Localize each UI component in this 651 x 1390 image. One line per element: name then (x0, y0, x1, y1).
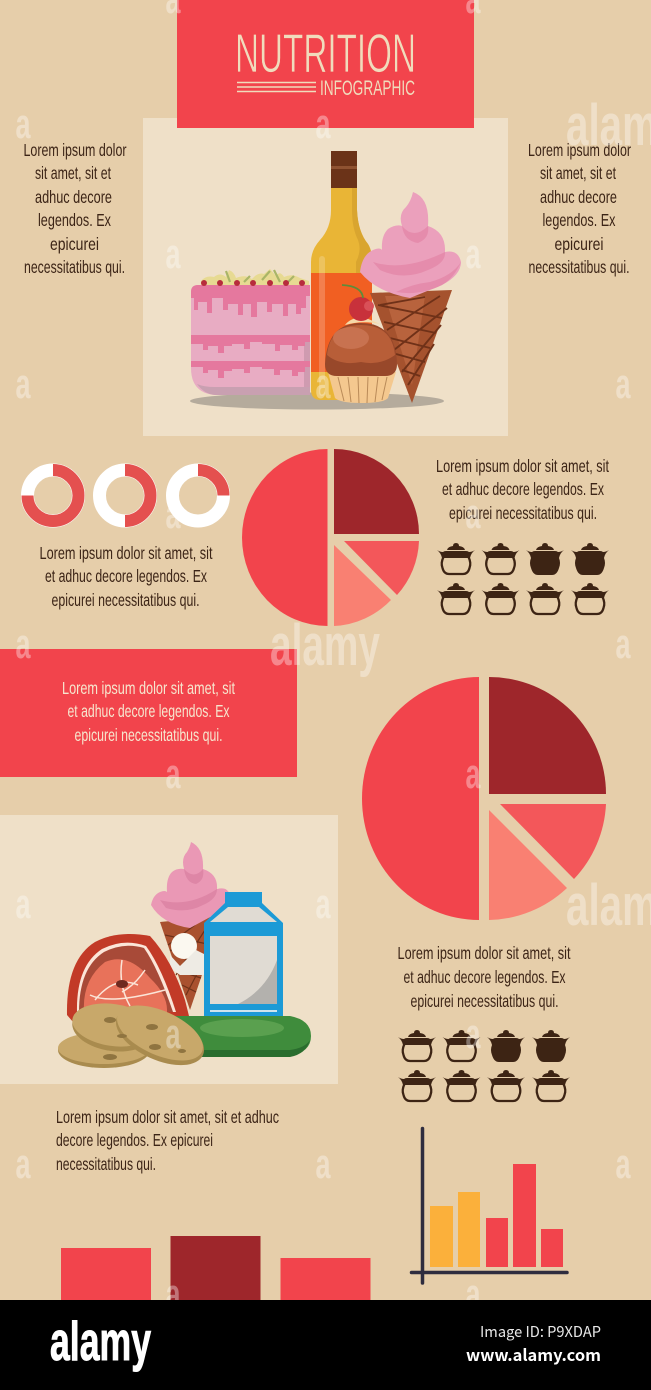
text block: lower right: et adhuc decore legendos. Ex (404, 967, 566, 987)
watermarks: a (16, 1140, 31, 1187)
donut charts (28, 470, 224, 521)
watermarks: a (466, 1270, 481, 1317)
text block: lower left: Lorem ipsum dolor sit amet, sit et adhuc (56, 1107, 279, 1127)
text block: top left: necessitatibus qui. (24, 257, 125, 277)
text block: callout (62, 678, 235, 745)
text block: top right: sit amet, sit et (540, 163, 616, 183)
icon: bottle (311, 151, 372, 400)
watermarks: a (466, 750, 481, 797)
subtitle: INFOGRAPHIC (320, 77, 415, 100)
text block: lower right: Lorem ipsum dolor sit amet, sit (398, 943, 571, 963)
text block: top right: adhuc decore (540, 187, 617, 207)
illustration: desserts and bottle (190, 151, 461, 410)
watermarks: a (316, 100, 331, 147)
icon: cake (191, 269, 310, 395)
watermarks: a (16, 620, 31, 667)
watermarks: a (616, 1140, 631, 1187)
icon: milk carton (204, 892, 283, 1016)
bottom bars (61, 1236, 370, 1300)
watermarks: a (316, 880, 331, 927)
text block: callout: et adhuc decore legendos. Ex (68, 701, 230, 721)
text block: callout: epicurei necessitatibus qui. (74, 725, 222, 745)
watermarks: a (16, 880, 31, 927)
text block: lower right (398, 943, 571, 1011)
watermarks: a (616, 360, 631, 407)
text block: top left (24, 140, 127, 277)
text block: lower left: decore legendos. Ex epicurei (56, 1130, 213, 1150)
text block: top right (528, 140, 631, 277)
text block: under donuts: Lorem ipsum dolor sit amet, sit (40, 543, 213, 563)
title: NUTRITION (235, 22, 416, 84)
icon: ham (67, 934, 190, 1030)
text block: top left: legendos. Ex (38, 210, 111, 230)
text block: top left: Lorem ipsum dolor (24, 140, 127, 160)
panel: red callout (0, 649, 297, 777)
text block: upper right (436, 456, 609, 523)
watermarks: a (466, 1010, 481, 1057)
watermarks: a (16, 100, 31, 147)
watermarks: alamy (270, 613, 380, 678)
text block: lower left: necessitatibus qui. (56, 1154, 156, 1174)
text block: top right: epicurei (554, 234, 604, 254)
text block: top left: sit amet, sit et (35, 163, 111, 183)
watermarks: a (166, 1010, 181, 1057)
watermarks: a (166, 750, 181, 797)
panel: dessert illustration backdrop (143, 118, 508, 436)
text block: top right: legendos. Ex (542, 210, 616, 230)
panel: food illustration backdrop (0, 815, 338, 1084)
watermarks: a (166, 230, 181, 277)
watermarks: a (466, 230, 481, 277)
text block: lower left (56, 1107, 279, 1174)
icons: pot rows lower (398, 1030, 570, 1101)
icon: ice cream cone (151, 842, 230, 1010)
text block: top left: adhuc decore (35, 187, 112, 207)
icon: cookies (58, 994, 213, 1077)
text block: under donuts (40, 543, 213, 610)
watermarks: a (466, 490, 481, 537)
bar chart (412, 1128, 567, 1283)
footer bar (0, 1300, 651, 1390)
title lines (237, 82, 316, 92)
image id: Image ID: P9XDAP (480, 1321, 601, 1342)
icon: ice cream cone (360, 192, 461, 403)
text block: lower right: epicurei necessitatibus qui. (410, 991, 558, 1011)
icon: cupcake (325, 285, 397, 403)
watermarks: a (316, 360, 331, 407)
illustration: food group (58, 842, 311, 1077)
pie chart: lower (362, 677, 606, 920)
website: www.alamy.com (466, 1342, 601, 1366)
pie chart: upper (242, 449, 419, 626)
text block: callout: Lorem ipsum dolor sit amet, sit (62, 678, 235, 698)
text block: under donuts: et adhuc decore legendos. Ex (45, 566, 207, 586)
text block: top left: epicurei (50, 234, 99, 254)
text block: under donuts: epicurei necessitatibus qui. (52, 590, 200, 610)
panel: title banner (177, 0, 474, 128)
watermarks: a (166, 490, 181, 537)
icon: cucumber (172, 1016, 311, 1057)
watermarks: a (616, 620, 631, 667)
watermarks: a (16, 360, 31, 407)
footer logo: alamy (50, 1310, 151, 1372)
watermarks: a (316, 1140, 331, 1187)
icons: pot rows upper (437, 543, 609, 614)
watermarks: a (166, 1270, 181, 1317)
